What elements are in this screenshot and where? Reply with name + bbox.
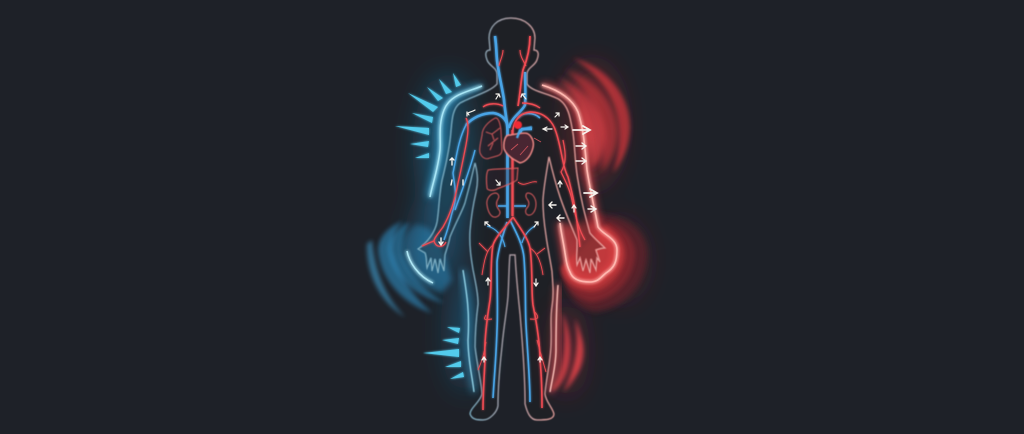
flow arrows [439, 94, 597, 362]
body outline [418, 18, 605, 420]
heat glow: red haze [552, 65, 644, 395]
blue veins [444, 36, 540, 402]
cold glow: blue haze [414, 78, 482, 390]
cold spikes upper left [395, 73, 461, 158]
lungs [480, 118, 502, 159]
heat waves upper right [552, 58, 630, 173]
cold spikes lower left [423, 327, 464, 379]
cold waves near left hand [367, 221, 452, 317]
heat lobes around right hand [560, 212, 647, 312]
kidneys [487, 193, 536, 217]
liver [486, 168, 518, 190]
blue glowing contour of left arm [430, 86, 482, 392]
red glowing contour of right arm and hand [542, 85, 617, 392]
heart [504, 121, 541, 163]
heat waves lower right [550, 312, 584, 392]
red arteries [422, 36, 585, 410]
